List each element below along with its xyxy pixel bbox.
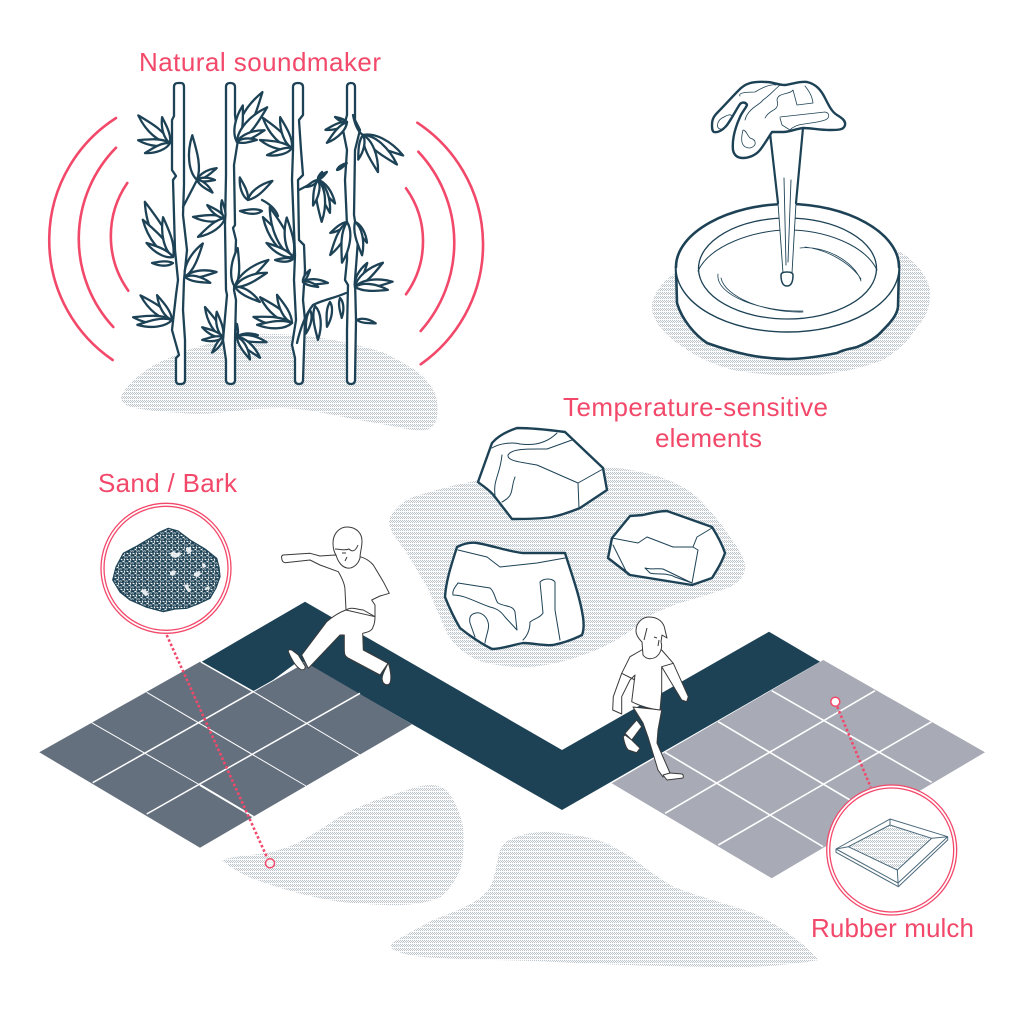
bamboo leaves bbox=[133, 89, 406, 361]
child walking bbox=[613, 617, 688, 780]
halftone ground patch: bamboo bbox=[121, 334, 438, 430]
leader line: sand bark bbox=[167, 635, 274, 868]
heading: Rubber mulch: Rubber mulch bbox=[811, 913, 974, 943]
heading: Temperature-sensitive elements bbox=[563, 392, 828, 453]
icon: sand mound bbox=[113, 528, 220, 612]
heading line 2: elements bbox=[655, 423, 762, 453]
tile divider lines bbox=[92, 662, 360, 817]
bamboo illustration bbox=[133, 83, 406, 384]
child jumping bbox=[282, 527, 391, 685]
bamboo stalk 1 bbox=[172, 83, 187, 384]
sound waves right bbox=[406, 123, 483, 364]
foot bbox=[663, 773, 683, 780]
sand bark tile grid bbox=[39, 662, 412, 848]
halftone ground patch: rocks bbox=[389, 467, 745, 667]
rubber mulch tile grid bbox=[612, 660, 985, 878]
bamboo stalk 4 bbox=[343, 83, 360, 384]
halftone ground patch: lower left bbox=[222, 785, 464, 905]
bamboo stalk 3 bbox=[292, 83, 305, 384]
heading: Sand / Bark: Sand / Bark bbox=[98, 468, 238, 498]
fountain basin inner bbox=[698, 218, 876, 319]
sound waves left bbox=[49, 118, 128, 360]
heading line 1: Temperature-sensitive bbox=[563, 392, 828, 422]
leader line: rubber mulch bbox=[831, 697, 871, 787]
heading: Natural soundmaker: Natural soundmaker bbox=[139, 47, 381, 77]
callout circle: rubber mulch bbox=[827, 785, 957, 915]
callout circle: sand bark bbox=[101, 503, 231, 633]
fountain rim bbox=[676, 204, 899, 332]
head bbox=[333, 527, 362, 568]
tiles bbox=[39, 662, 412, 848]
legs bbox=[302, 610, 388, 675]
water jet bbox=[770, 128, 803, 273]
feet bbox=[288, 650, 391, 685]
water highlights bbox=[718, 247, 861, 312]
torso and arms bbox=[613, 650, 688, 714]
front leg bbox=[633, 707, 670, 777]
bamboo stalk 2 bbox=[223, 83, 238, 384]
icon: rubber mat bbox=[836, 819, 948, 887]
halftone ground patch: lower centre bbox=[391, 832, 819, 967]
water spout bbox=[781, 272, 793, 286]
rock lower left bbox=[445, 543, 584, 649]
back leg bbox=[625, 720, 642, 740]
back foot bbox=[623, 735, 640, 753]
halftone ground patch: fountain bbox=[652, 250, 930, 375]
torso and arms bbox=[282, 553, 389, 617]
fountain base side bbox=[676, 267, 899, 359]
fountain bbox=[676, 82, 899, 359]
tile divider lines bbox=[665, 691, 932, 847]
head bbox=[636, 617, 667, 659]
tiles bbox=[612, 660, 985, 878]
rock right bbox=[608, 511, 725, 585]
dark path bbox=[202, 602, 820, 810]
rock top bbox=[478, 428, 607, 519]
water crown bbox=[712, 82, 845, 158]
